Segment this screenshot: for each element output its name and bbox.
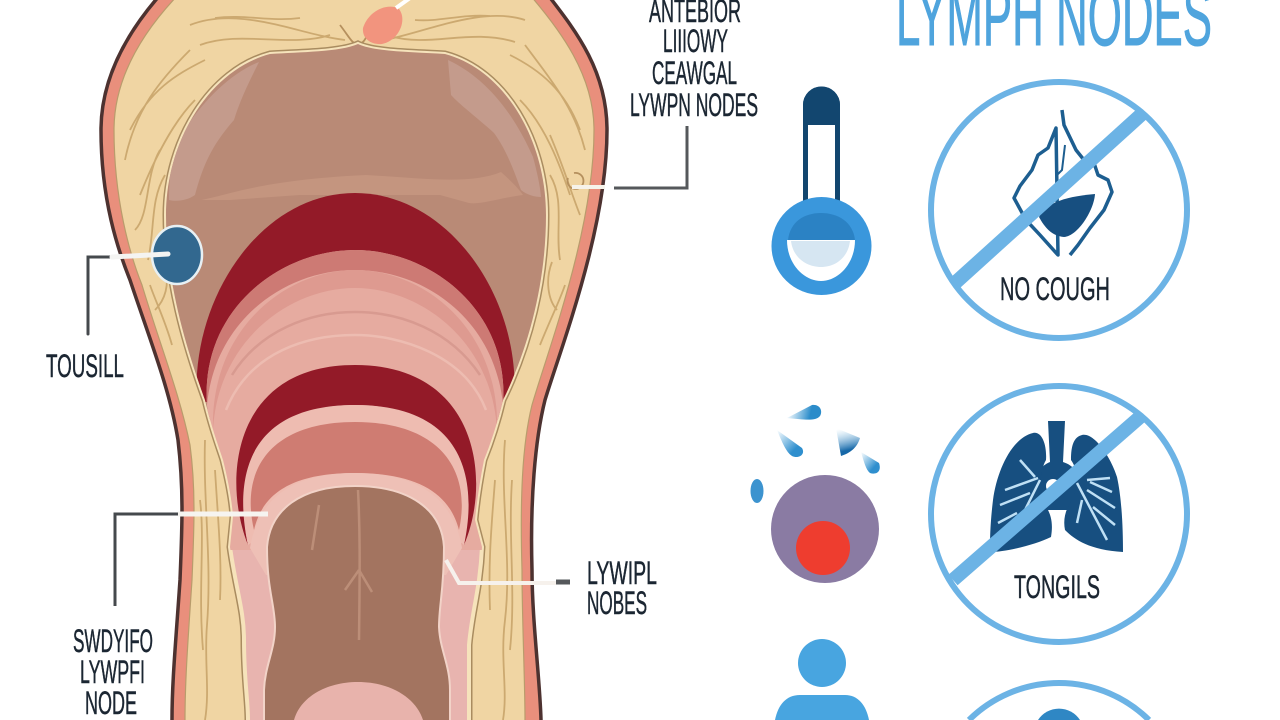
label: anterior cervical lymph nodes: LIIIOWY (663, 23, 728, 59)
beige tissue layer (114, 0, 594, 720)
icon: droplets and red spot (750, 405, 880, 583)
panel: tonsils (931, 386, 1187, 642)
prohibition ring (931, 82, 1187, 338)
label: no cough: NO COUGH (1000, 271, 1110, 307)
callout: lower left leader line (115, 514, 268, 606)
panel: no cough (931, 82, 1187, 338)
pink throat wall and cavity outline (166, 44, 546, 720)
icon: thermometer (772, 86, 872, 295)
interior of the mouth (166, 44, 546, 720)
prohibition slash (955, 113, 1143, 283)
label: swollen lymph node: NODE (85, 685, 137, 720)
prohibition slash (953, 417, 1140, 580)
callout: tonsil leader line (88, 254, 168, 334)
label: tonsils: TONGILS (1014, 569, 1100, 605)
panel: third prohibition circle (969, 683, 1149, 720)
label: anterior cervical lymph nodes: LYWPN NODES (630, 87, 758, 123)
throat anatomy illustration (101, 0, 607, 720)
small pink gland at top (363, 7, 402, 44)
outer skin layer (101, 0, 607, 720)
blue tonsil node (152, 226, 202, 284)
label: swollen lymph node: SWDYIFO (73, 623, 153, 659)
label: anterior cervical lymph nodes (630, 0, 758, 123)
label: lymph nodes: NOBES (587, 585, 647, 621)
callout: anterior cervical leader line (572, 126, 687, 188)
needle highlight at top gland (396, 0, 410, 8)
label: lymph nodes: LYWIPL (587, 555, 657, 591)
label: swollen lymph node: LYWPFI (80, 654, 145, 690)
prohibition ring (931, 386, 1187, 642)
light arch around tongue (250, 473, 462, 575)
lower red crescent (236, 365, 476, 545)
label: lymph nodes (587, 555, 657, 621)
label: tonsil: TOUSILL (46, 348, 124, 384)
icon: lungs (990, 421, 1123, 552)
rose inner dome (251, 422, 462, 530)
icon: head partial (1038, 709, 1080, 720)
pink dome with bands (207, 250, 503, 550)
icon: flame (1014, 110, 1112, 255)
upper red arch (197, 193, 515, 402)
light pink band (243, 405, 469, 545)
callout: lymph nodes leader line (446, 560, 570, 583)
mouth cavity (166, 44, 546, 420)
pale oval at tongue base (294, 682, 423, 720)
label: swollen lymph node (73, 623, 153, 720)
icon: person (775, 639, 869, 720)
label: anterior cervical lymph nodes: CEAWGAL (652, 55, 737, 91)
tongue (264, 486, 450, 720)
